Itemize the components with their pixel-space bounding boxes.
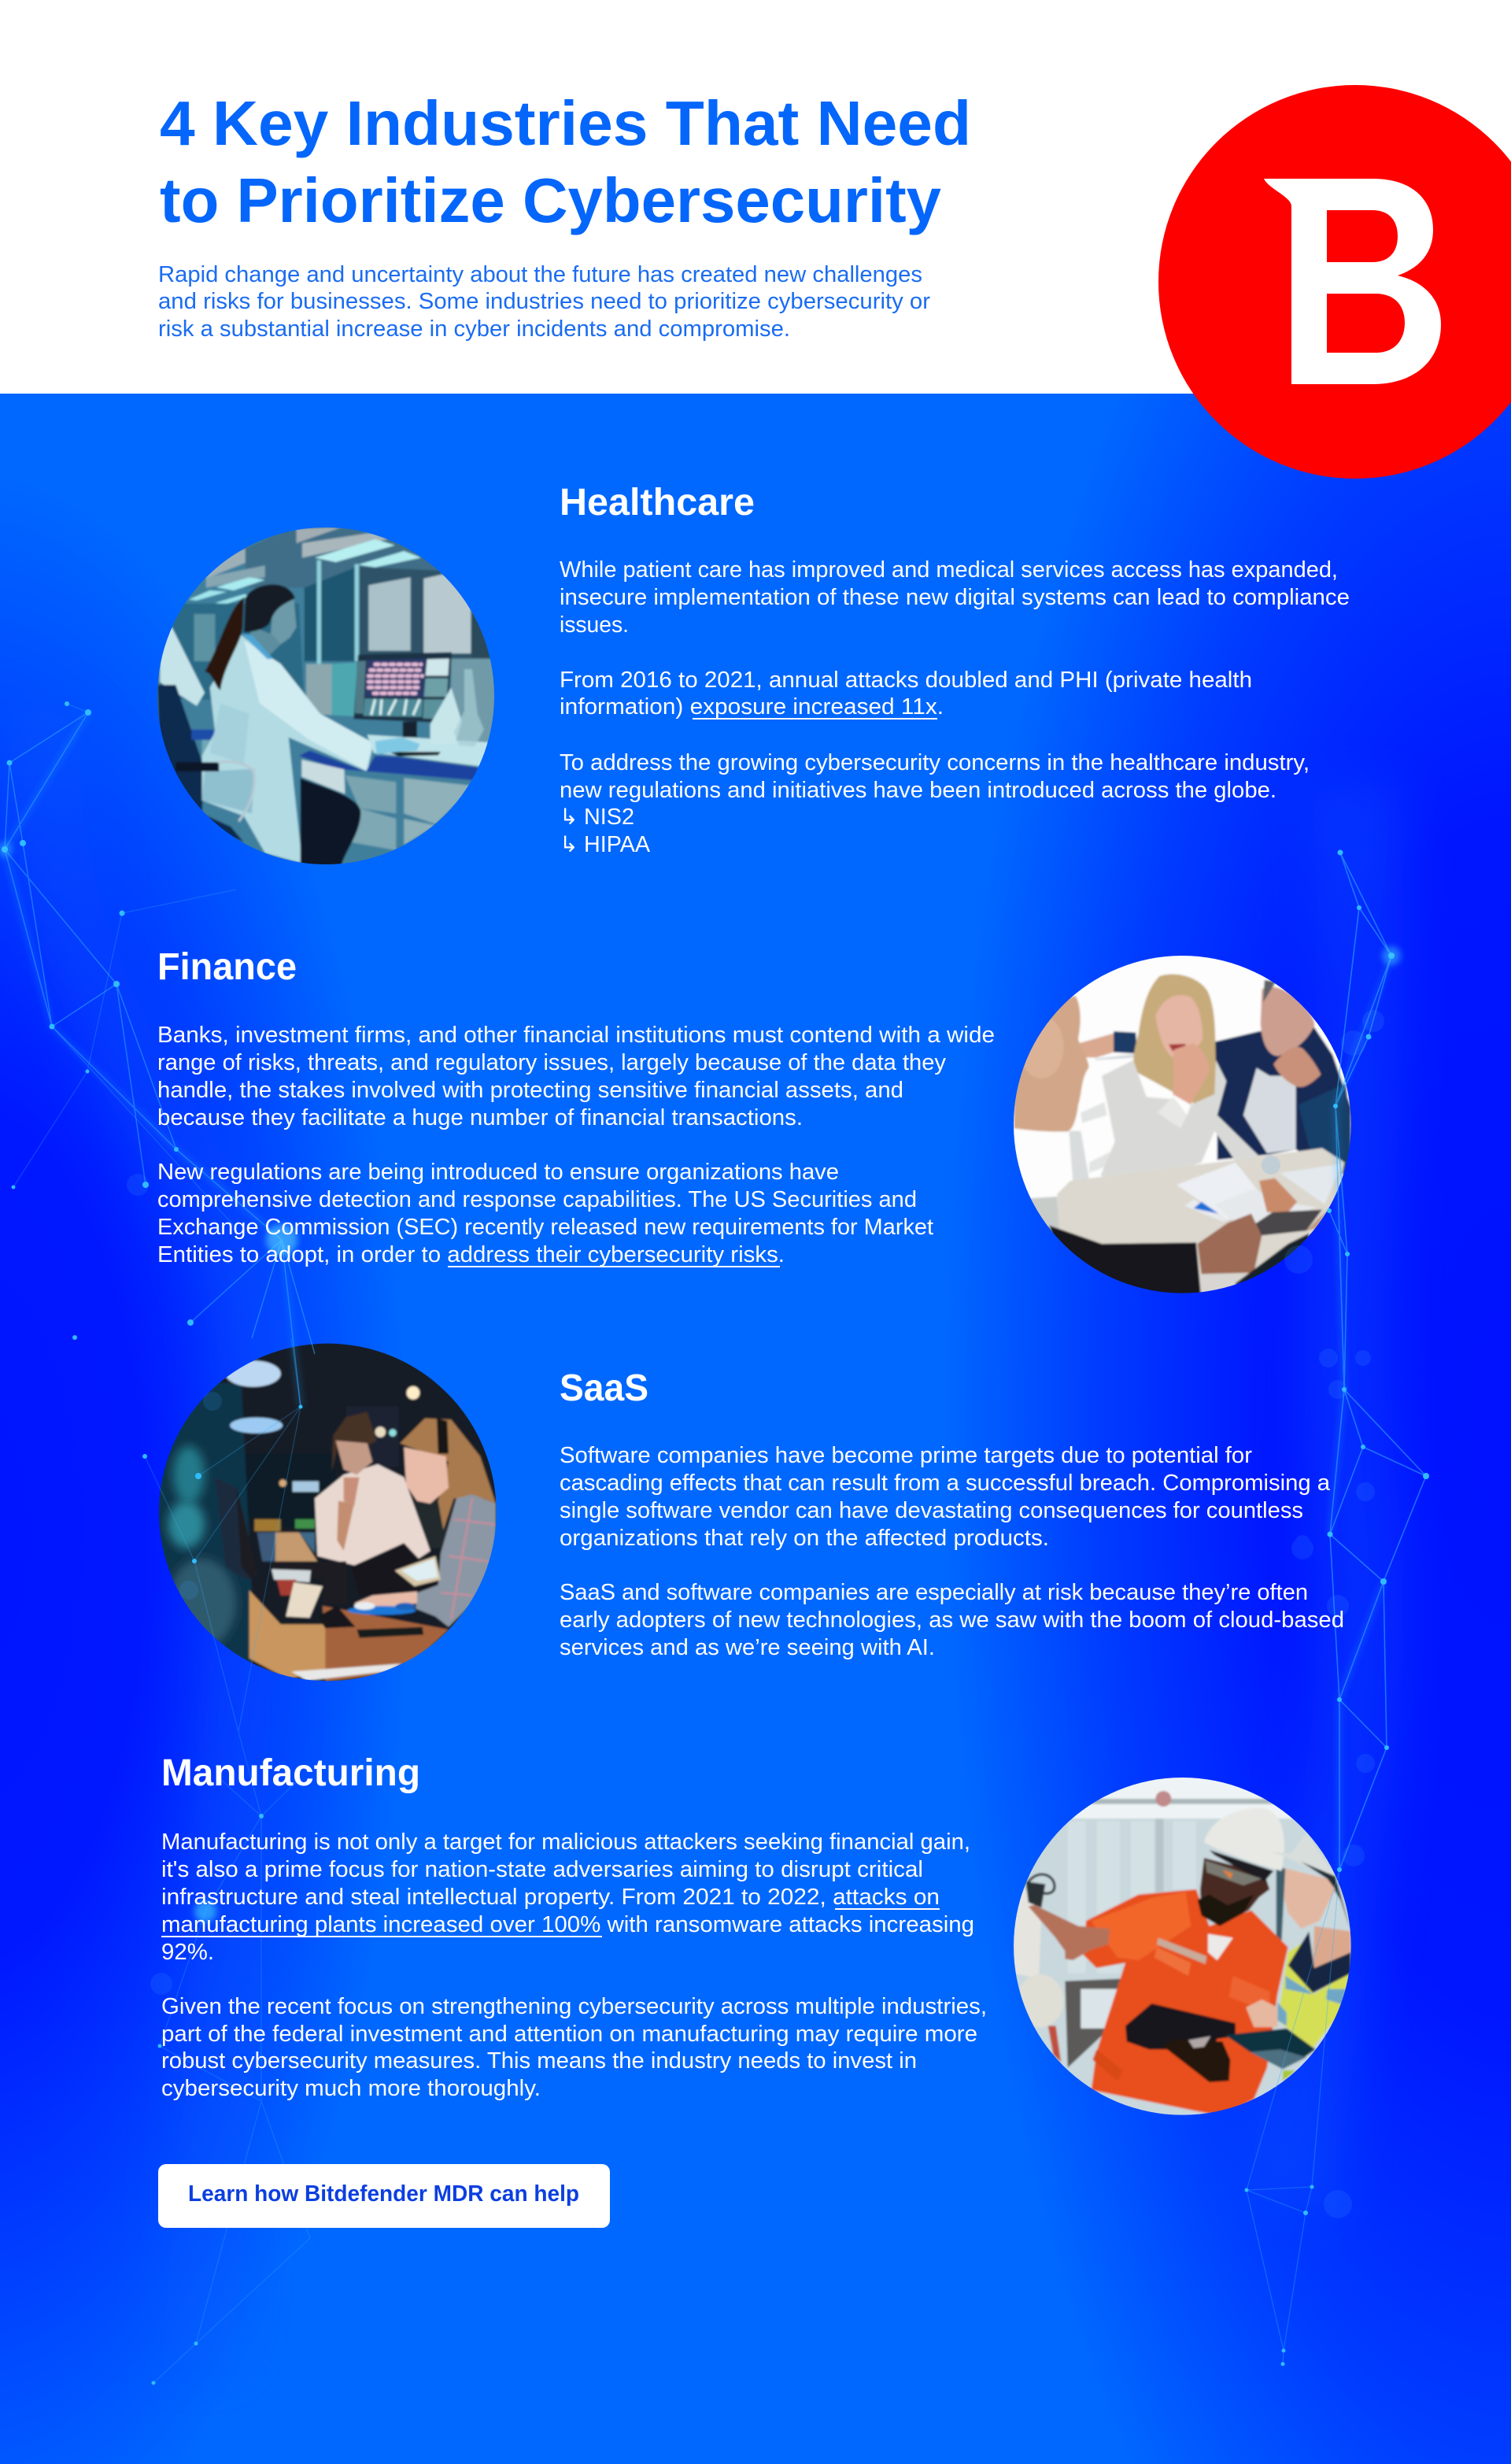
button: learn how Bitdefender MDR can help: Learn how Bitdefender MDR can help (188, 2181, 579, 2207)
text block: healthcare: new regulations and initiatives have been introduced across the globe. (560, 778, 1276, 803)
intro text: risk a substantial increase in cyber incidents and compromise. (158, 316, 790, 342)
text block: saas: Software companies have become prime targets due to potential for (560, 1443, 1252, 1468)
text block: manufacturing (161, 1830, 987, 2101)
text block: finance: because they facilitate a huge number of financial transactions. (157, 1105, 803, 1130)
panel: manufacturing (161, 1752, 987, 2101)
heading: manufacturing: Manufacturing (161, 1752, 420, 1794)
text block: healthcare: issues. (560, 612, 629, 638)
photo: manufacturing engineers in hard hats (1010, 1774, 1356, 2120)
text block: manufacturing: manufacturing plants increased over 100% with ransomware attacks increasing (161, 1912, 974, 1937)
photo: lab scientist at a monitor (152, 520, 501, 871)
text block: saas: organizations that rely on the affected products. (560, 1526, 1049, 1551)
white header background (0, 0, 1511, 394)
text block: healthcare: HIPAA (584, 832, 651, 857)
text block: healthcare: To address the growing cybersecurity concerns in the healthcare industry, (560, 750, 1310, 775)
panel: finance (157, 946, 995, 1267)
text block: healthcare (560, 557, 1350, 857)
text block: finance (157, 1023, 995, 1267)
text block: healthcare: ↳ (560, 804, 578, 830)
text block: healthcare: NIS2 (584, 805, 634, 830)
text block: healthcare: ↳ (560, 831, 578, 857)
text block: saas: cascading effects that can result from a successful breach. Compromising a (560, 1471, 1331, 1496)
title (160, 88, 971, 235)
heading: finance: Finance (157, 946, 297, 988)
text block: finance: handle, the stakes involved with protecting sensitive financial assets, and (157, 1078, 903, 1103)
intro text: and risks for businesses. Some industries need to prioritize cybersecurity or (158, 289, 930, 314)
text block: saas: SaaS and software companies are especially at risk because they’re often (560, 1580, 1308, 1605)
text block: finance: Exchange Commission (SEC) recently released new requirements for Market (157, 1215, 933, 1240)
text block: healthcare: information) exposure increased 11x. (560, 694, 944, 720)
text block: healthcare: While patient care has improved and medical services access has expanded, (560, 557, 1338, 583)
title: to Prioritize Cybersecurity (160, 165, 942, 235)
title: 4 Key Industries That Need (160, 88, 971, 158)
photo: worried clients at a finance meeting (1010, 953, 1356, 1300)
panel: healthcare (560, 482, 1350, 857)
heading: healthcare: Healthcare (560, 482, 755, 524)
text block: saas: services and as we’re seeing with AI. (560, 1635, 935, 1660)
text block: manufacturing: robust cybersecurity measures. This means the industry needs to invest in (161, 2048, 917, 2074)
photo: two women working at a SaaS help desk (155, 1341, 501, 1687)
text block: finance: range of risks, threats, and regulatory issues, largely because of the data they (157, 1050, 946, 1075)
text block: manufacturing: cybersecurity much more thoroughly. (161, 2076, 541, 2101)
text block: saas: early adopters of new technologies, as we saw with the boom of cloud-based (560, 1608, 1344, 1633)
text block: finance: Banks, investment firms, and other financial institutions must contend with a wide (157, 1023, 995, 1048)
text block: saas: single software vendor can have devastating consequences for countless (560, 1498, 1303, 1523)
text block: manufacturing: Given the recent focus on strengthening cybersecurity across multiple industries, (161, 1994, 987, 2019)
heading: saas: SaaS (560, 1367, 648, 1409)
text block: healthcare: insecure implementation of these new digital systems can lead to compliance (560, 585, 1350, 610)
text block: manufacturing: Manufacturing is not only a target for malicious attackers seeking financial gain, (161, 1830, 970, 1855)
panel: saas (560, 1367, 1344, 1660)
text block: manufacturing: part of the federal investment and attention on manufacturing may require more (161, 2022, 977, 2047)
intro text: Rapid change and uncertainty about the future has created new challenges (158, 262, 922, 287)
intro text (158, 262, 930, 342)
logo: red circle with white B (1158, 85, 1511, 479)
text block: saas (560, 1443, 1344, 1660)
text block: manufacturing: it's also a prime focus for nation-state adversaries aiming to disrupt critical (161, 1857, 923, 1882)
network of glowing lines and nodes (0, 701, 1429, 2385)
button: learn how Bitdefender MDR can help (158, 2164, 610, 2228)
text block: healthcare: From 2016 to 2021, annual attacks doubled and PHI (private health (560, 668, 1252, 693)
text block: manufacturing: 92%. (161, 1940, 214, 1965)
text block: finance: Entities to adopt, in order to address their cybersecurity risks. (157, 1242, 785, 1267)
text block: manufacturing: infrastructure and steal intellectual property. From 2021 to 2022, attacks on (161, 1885, 940, 1910)
text block: finance: New regulations are being introduced to ensure organizations have (157, 1160, 839, 1185)
text block: finance: comprehensive detection and response capabilities. The US Securities and (157, 1187, 917, 1212)
